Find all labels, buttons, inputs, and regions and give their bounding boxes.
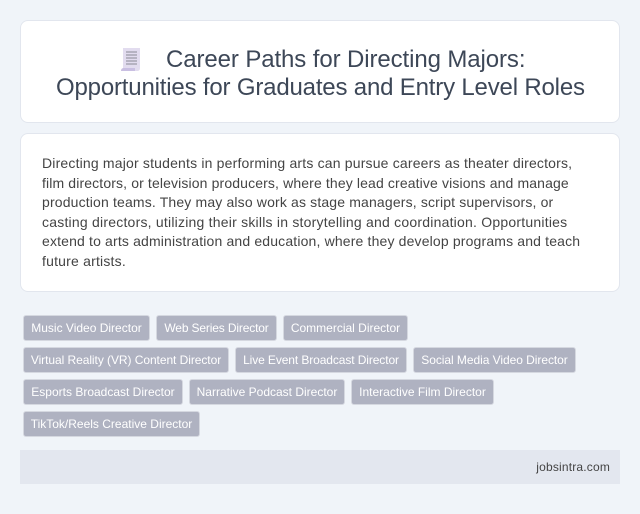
tag: Commercial Director — [291, 321, 400, 335]
tag: Interactive Film Director — [359, 385, 486, 399]
description text: extend to arts administration and education, where they develop programs and teach — [42, 233, 580, 249]
tag: Live Event Broadcast Director — [243, 353, 399, 367]
tag — [235, 347, 407, 373]
description text: Directing major students in performing arts can pursue careers as theater directors, — [42, 155, 572, 171]
tag: Esports Broadcast Director — [31, 385, 175, 399]
tag: Web Series Director — [164, 321, 269, 335]
tag: TikTok/Reels Creative Director — [31, 417, 192, 431]
title line 2: Opportunities for Graduates and Entry Level Roles — [56, 74, 585, 101]
description text — [42, 155, 580, 269]
tag: Virtual Reality (VR) Content Director — [31, 353, 221, 367]
description text: production teams. They may also work as stage managers, script supervisors, or — [42, 194, 553, 210]
tag — [413, 347, 576, 373]
tag — [351, 379, 494, 405]
tag — [23, 315, 150, 341]
tag: Narrative Podcast Director — [197, 385, 337, 399]
description text: future artists. — [42, 253, 126, 269]
description text: casting directors, utilizing their skills in storytelling and coordination. Opportunities — [42, 214, 567, 230]
tag — [23, 347, 229, 373]
tag — [23, 379, 183, 405]
tag: Music Video Director — [31, 321, 142, 335]
tag — [23, 411, 200, 437]
tag list — [23, 315, 576, 437]
tag — [189, 379, 345, 405]
footer bar — [20, 450, 620, 484]
description card — [20, 133, 620, 292]
tag — [156, 315, 277, 341]
tag — [283, 315, 408, 341]
title line 1: Career Paths for Directing Majors: — [166, 46, 525, 73]
description text: film directors, or television producers, where they lead creative visions and manage — [42, 175, 569, 191]
footer site name: jobsintra.com — [536, 460, 610, 474]
tag: Social Media Video Director — [421, 353, 568, 367]
icon: scroll document — [121, 48, 140, 71]
title card — [20, 20, 620, 123]
